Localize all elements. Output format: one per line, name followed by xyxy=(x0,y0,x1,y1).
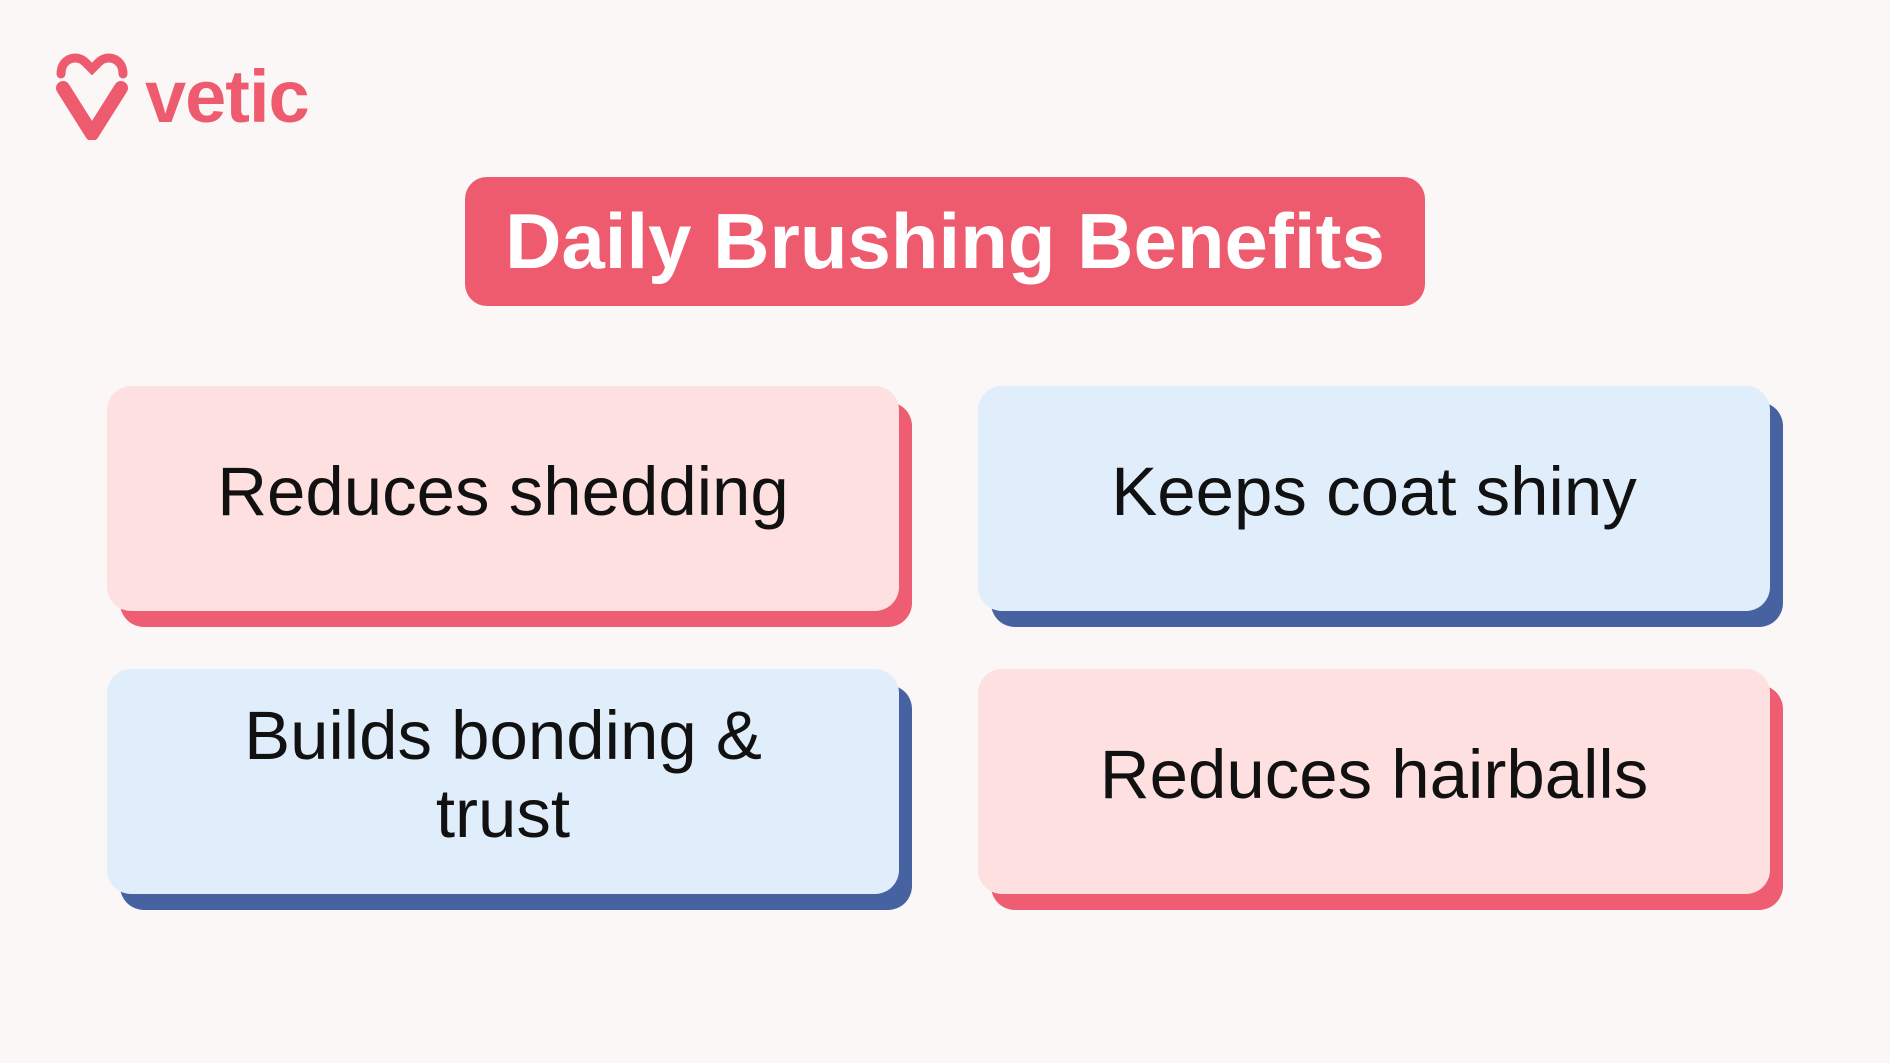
card: reduces shedding xyxy=(107,386,899,611)
card: keeps coat shiny: Keeps coat shiny xyxy=(1111,452,1637,530)
card: keeps coat shiny xyxy=(978,386,1770,611)
card: reduces hairballs xyxy=(978,669,1770,894)
card: builds bonding: trust xyxy=(436,774,570,852)
card: reduces hairballs: Reduces hairballs xyxy=(1100,736,1648,812)
card: builds bonding xyxy=(107,669,899,894)
logo text: vetic xyxy=(145,55,309,138)
card: builds bonding: Builds bonding & xyxy=(244,696,762,774)
logo xyxy=(56,54,309,140)
card: reduces shedding: Reduces shedding xyxy=(217,452,789,530)
icon: heart V xyxy=(56,54,128,140)
title xyxy=(465,177,1425,306)
title: Daily Brushing Benefits xyxy=(505,197,1385,285)
